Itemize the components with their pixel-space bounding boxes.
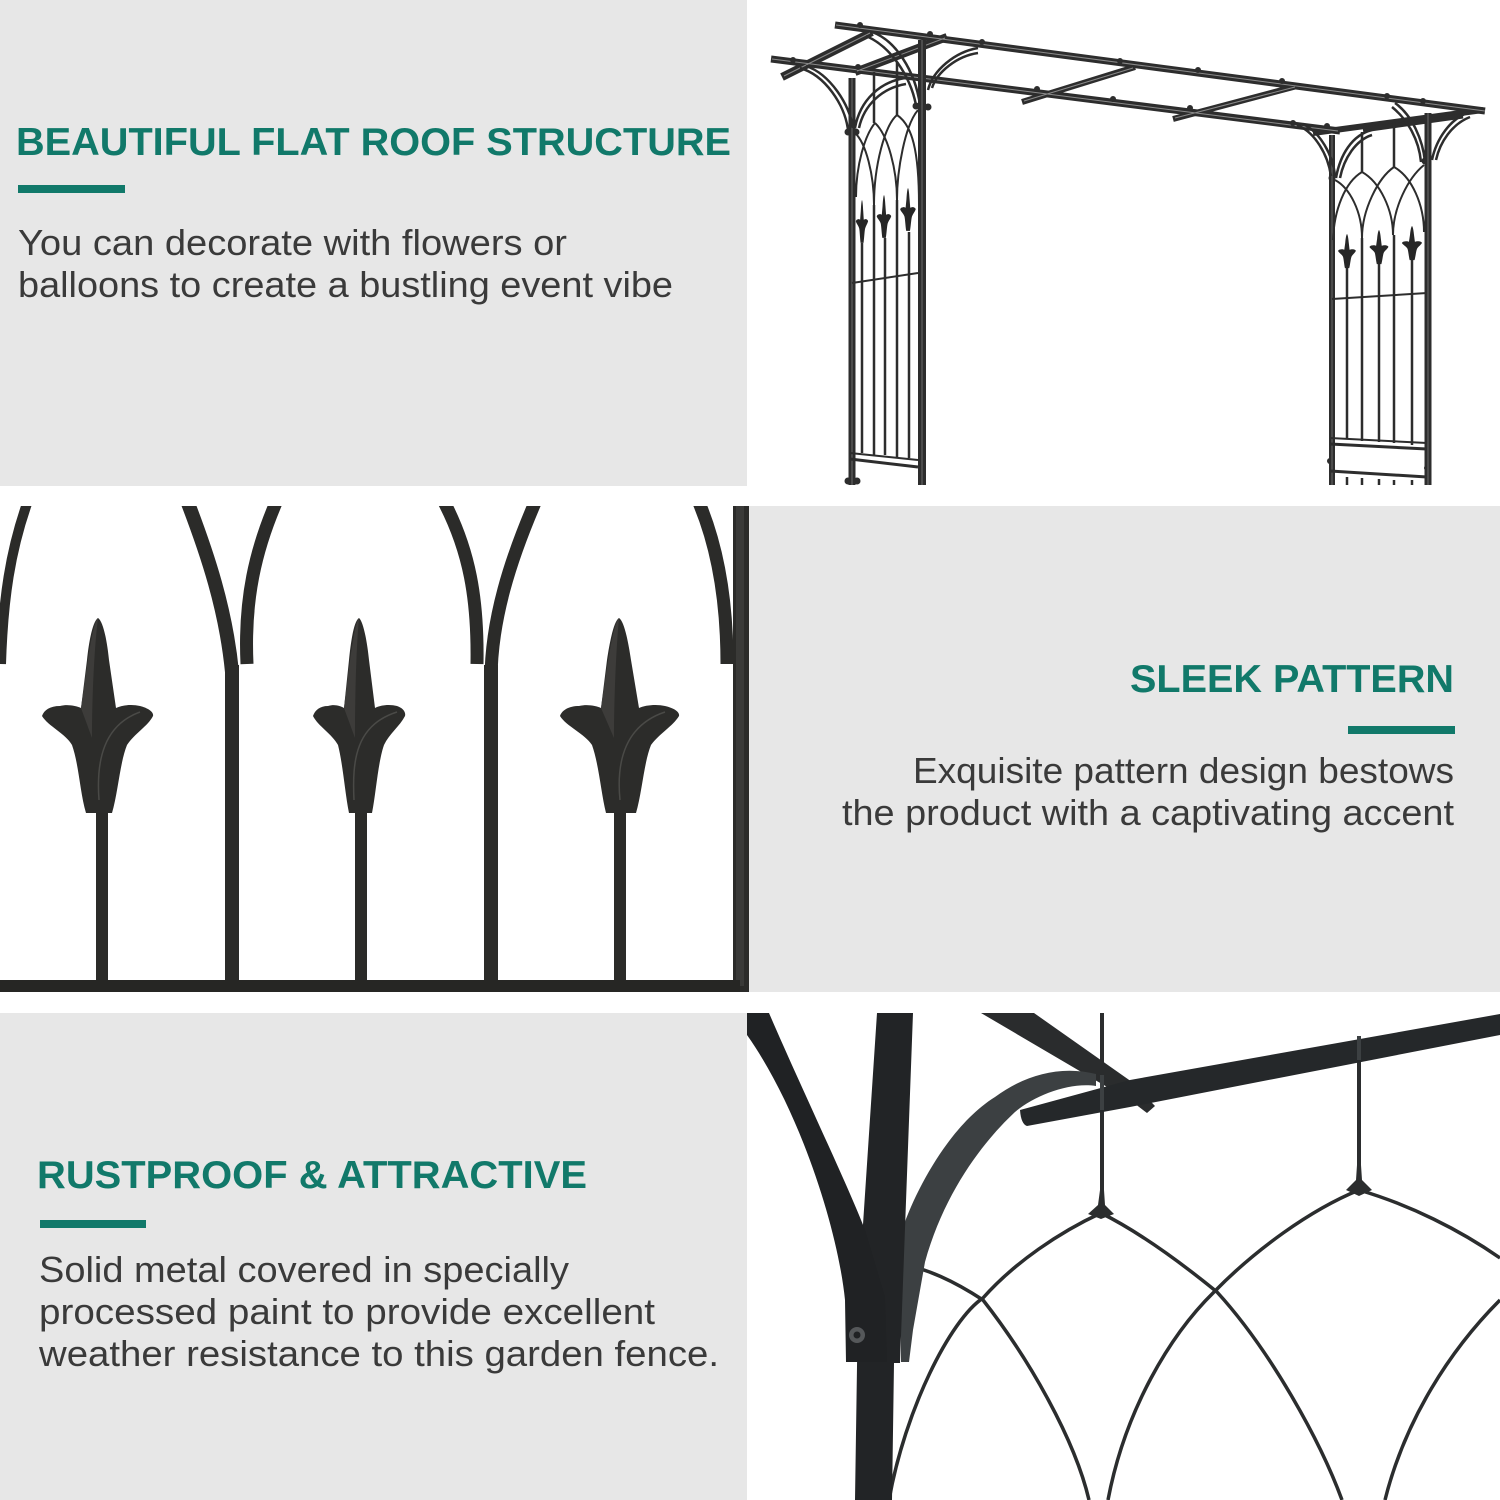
accent bar [18, 185, 125, 193]
right frame finials [1338, 226, 1422, 268]
body text: sleek pattern [842, 750, 1454, 833]
left frame finials [856, 188, 916, 243]
bracket bolt [849, 1327, 865, 1343]
left frame [800, 32, 978, 485]
body text: sleek pattern: Exquisite pattern design bestows [913, 750, 1454, 791]
wire junctions [1088, 1165, 1372, 1219]
vertical posts [96, 506, 749, 992]
panel: pattern close-up [0, 498, 749, 992]
body text: rustproof: Solid metal covered in specially [39, 1249, 569, 1290]
heading: flat roof: BEAUTIFUL FLAT ROOF STRUCTURE [16, 121, 731, 164]
panel: flat roof text [0, 0, 747, 486]
hanger over rail [1100, 1036, 1361, 1110]
finial right [560, 618, 679, 813]
body text: flat roof: You can decorate with flowers or [18, 222, 567, 263]
finial left [42, 618, 153, 813]
left sweeping arc with bracket [747, 1013, 887, 1362]
panel: sleek pattern text [749, 506, 1500, 992]
heading: rustproof: RUSTPROOF & ATTRACTIVE [37, 1154, 587, 1197]
heading: sleek pattern: SLEEK PATTERN [1130, 658, 1454, 701]
finial centre [313, 618, 405, 813]
right frame [1297, 103, 1470, 485]
body text: rustproof: weather resistance to this garden fence. [38, 1333, 719, 1374]
body text: flat roof [18, 222, 673, 305]
bottom bar [0, 980, 740, 992]
curved brace [901, 1071, 1096, 1362]
accent bar [1348, 726, 1455, 734]
roof rails [771, 25, 1485, 133]
rail bolts [790, 22, 1430, 484]
panel: full arbor illustration [771, 22, 1485, 485]
body text: flat roof: balloons to create a bustling event vibe [18, 264, 673, 305]
body text: rustproof: processed paint to provide excellent [39, 1291, 655, 1332]
cross bar [981, 1013, 1155, 1113]
main rail [1020, 1014, 1500, 1126]
body text: sleek pattern: the product with a captivating accent [842, 792, 1454, 833]
thin lattice wires [887, 1013, 1500, 1500]
panel: joint close-up [747, 1013, 1500, 1500]
arched bars [1, 498, 727, 680]
upright post [855, 1013, 913, 1500]
panel: rustproof text [0, 1013, 747, 1500]
accent bar [40, 1220, 146, 1228]
body text: rustproof [38, 1249, 719, 1374]
